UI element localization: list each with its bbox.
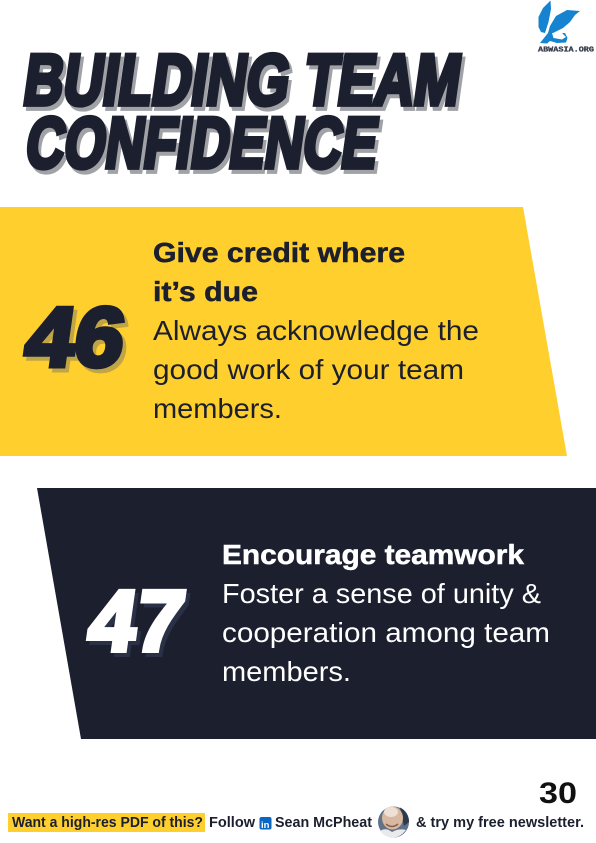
- title shadow: BUILDING TEAM: [22, 45, 469, 124]
- body 46: good work of your team: [153, 354, 464, 385]
- number 46 shadow: 46: [23, 294, 135, 388]
- number 46: 46: [20, 290, 131, 384]
- body 47: members.: [222, 656, 351, 687]
- newsletter text: & try my free newsletter.: [416, 814, 584, 831]
- icon: linkedin: [260, 817, 272, 831]
- title text: [10, 41, 466, 183]
- number 47 shadow: 47: [86, 578, 194, 673]
- title: [10, 41, 469, 187]
- panel: tip 47: [37, 488, 596, 739]
- avatar: author photo: [378, 806, 409, 838]
- footer call to action: [8, 806, 584, 838]
- title text: CONFIDENCE: [21, 104, 383, 183]
- heading 46: Give credit where: [153, 237, 405, 268]
- page number: 30: [539, 777, 577, 810]
- body 46: [153, 315, 479, 424]
- body 46: members.: [153, 393, 282, 424]
- follow label: Follow: [209, 814, 255, 831]
- title shadow: [13, 45, 469, 187]
- heading 46: it’s due: [153, 276, 258, 307]
- logo: abwasia griffin: [538, 0, 594, 54]
- highlight: PDF prompt: Want a high-res PDF of this?: [12, 814, 203, 831]
- body 47: cooperation among team: [222, 617, 550, 648]
- logo wordmark: ABWASIA.ORG: [538, 46, 594, 54]
- panel: tip 46: [0, 207, 567, 456]
- title text: BUILDING TEAM: [19, 41, 466, 120]
- author name: Sean McPheat: [275, 814, 372, 831]
- title shadow: CONFIDENCE: [24, 108, 386, 187]
- heading 46: [153, 237, 405, 307]
- icon: linkedin: in: [261, 820, 270, 831]
- body 46: Always acknowledge the: [153, 315, 479, 346]
- number 47: 47: [83, 574, 190, 669]
- heading 47: Encourage teamwork: [222, 539, 525, 570]
- body 47: [222, 578, 550, 687]
- body 47: Foster a sense of unity &: [222, 578, 541, 609]
